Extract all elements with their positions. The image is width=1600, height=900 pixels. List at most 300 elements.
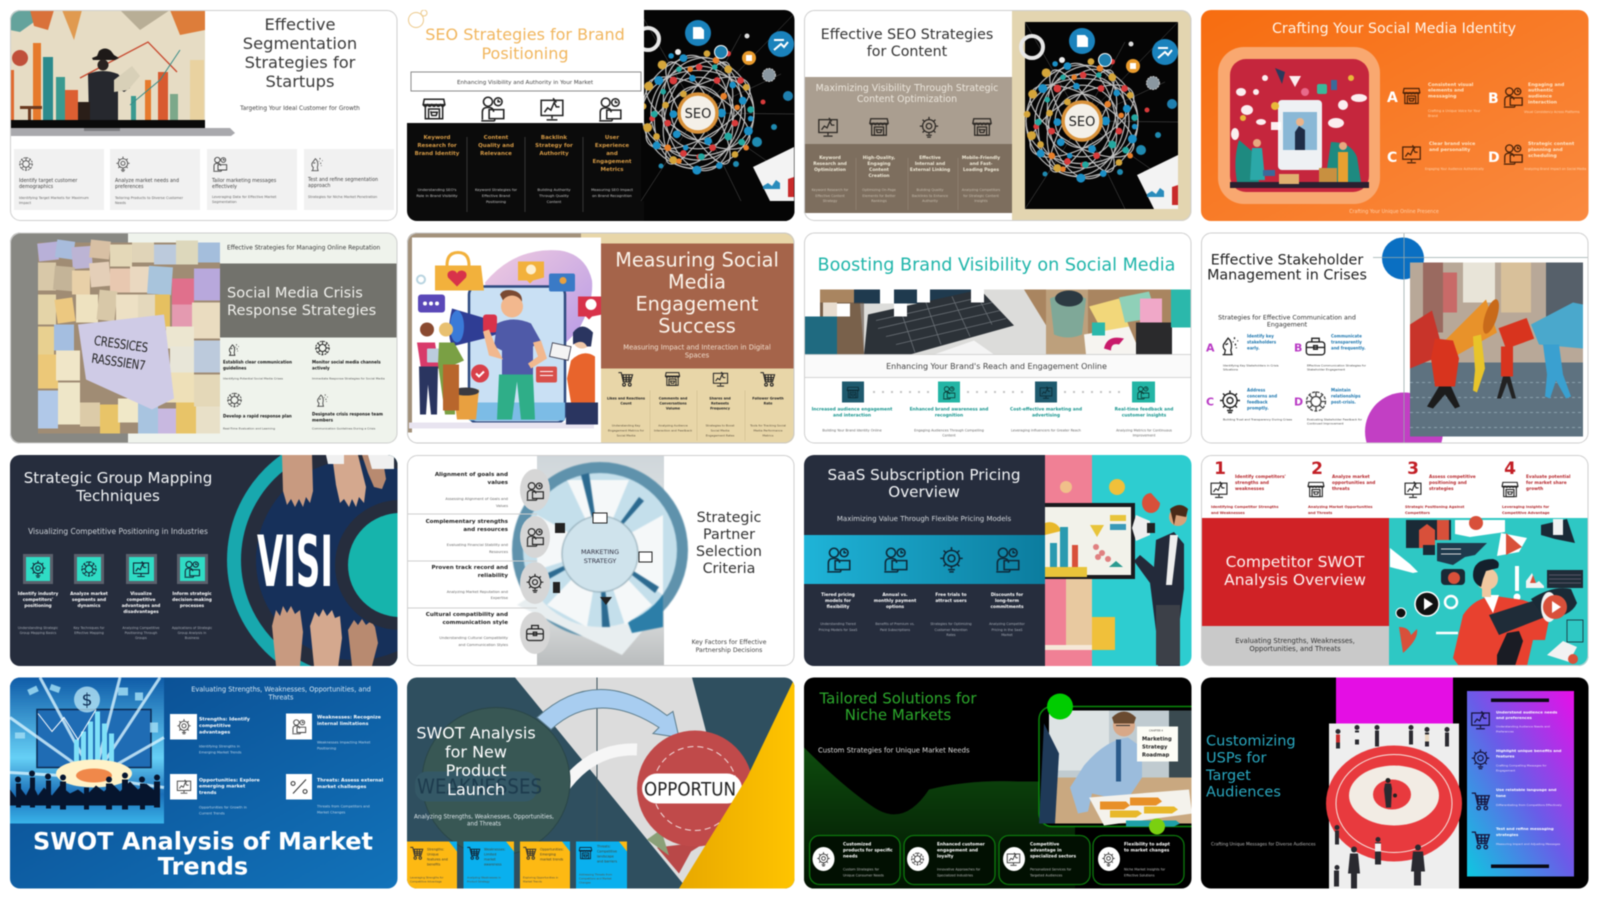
title: [696, 510, 762, 577]
column headings: Creation: [868, 173, 890, 179]
slide: SaaS Subscription Pricing Overview: [804, 455, 1192, 666]
slide: Measuring Social Media Engagement Success: [407, 232, 795, 444]
step headings: dynamics: [78, 603, 101, 609]
step captions: [18, 626, 212, 640]
threats: Threats: Assess external: [317, 778, 384, 784]
opportunities: [170, 774, 260, 816]
marketing strategy wheel: STRATEGY: [584, 557, 616, 565]
column captions: for Strategic Content: [963, 194, 999, 198]
column headings: Backlink: [541, 135, 567, 141]
opportunities: Current Trends: [199, 812, 225, 816]
column headings: monthly payment: [874, 598, 916, 604]
column captions: Measuring SEO Impact: [591, 188, 633, 192]
item C: [1206, 388, 1293, 422]
title: Boosting Brand Visibility on Social Media: [818, 256, 1175, 276]
gradient list panel: Understanding Audience Needs and: [1496, 724, 1550, 728]
column captions: Through Quality: [538, 194, 570, 198]
metric captions: [608, 424, 786, 438]
column captions: Building Authority: [537, 188, 571, 192]
step captions: Content: [942, 434, 956, 438]
four step cards: Identify target customer: [19, 178, 77, 184]
subtitle box: [411, 72, 641, 91]
step headings: threats: [1332, 486, 1350, 492]
SEO globe image: [1019, 22, 1178, 209]
column headings: Tiered pricing: [821, 592, 855, 598]
benefit cards: Unique Consumer Needs: [843, 874, 884, 878]
photo frame: Marketing: [1142, 736, 1172, 742]
item C: Address: [1247, 388, 1266, 392]
criterion rows: reliability: [478, 573, 508, 579]
item C: concerns and: [1247, 394, 1277, 398]
criterion rows: and resources: [463, 527, 509, 533]
title: [818, 690, 977, 724]
step headings: Inform strategic: [172, 591, 212, 597]
item A: A: [1206, 342, 1215, 354]
SWOT cards: Threats:: [596, 844, 611, 848]
title panel: Measuring Impact and Interaction in Digital: [623, 344, 771, 352]
criterion rows: communication style: [442, 620, 508, 626]
four step cards: preferences: [115, 184, 144, 190]
subtitle: Targeting Your Ideal Customer for Growth: [239, 106, 360, 112]
benefit cards: Customized: [843, 842, 871, 848]
item A: Identifying Key Stakeholders in Crisis: [1223, 364, 1279, 368]
column captions: Content: [547, 200, 562, 204]
column captions: Keyword Research for: [812, 188, 849, 192]
threats: Threats from Competitors and: [316, 804, 370, 808]
benefit cards: Enhanced customer: [937, 842, 986, 848]
item C: Building Trust and Transparency During Crises: [1223, 418, 1293, 422]
step headings: decision-making: [172, 597, 212, 603]
column headings: Effective: [919, 155, 941, 161]
weaknesses: Positioning: [317, 746, 336, 750]
column captions: Pricing Models for SaaS: [819, 628, 857, 632]
title: [243, 15, 357, 91]
item C: C: [1206, 396, 1214, 408]
metric headings: Volume: [666, 406, 681, 410]
blue circle: [1382, 238, 1424, 280]
metric headings: Follower Growth: [752, 396, 784, 400]
metric headings: Comments and: [659, 396, 688, 400]
step numbers: [1214, 459, 1516, 479]
item: team: Designate crisis response team: [312, 412, 383, 416]
item B: Engaging and: [1528, 82, 1564, 88]
criterion rows: Cultural compatibility and: [426, 612, 508, 618]
column captions: Building Quality: [917, 188, 943, 192]
gradient list panel: Differentiating from Competitors Effectively: [1496, 803, 1562, 807]
criterion rows: Proven track record and: [432, 565, 508, 571]
criterion rows: Values: [496, 504, 508, 508]
sticky-note wall: [37, 239, 220, 434]
title: Strategic Group Mapping: [24, 469, 212, 487]
title panel: Measuring Social: [615, 248, 779, 272]
benefit cards: specialized sectors: [1030, 854, 1077, 860]
column captions: Understanding SEO's: [418, 188, 456, 192]
step captions: [822, 428, 1172, 438]
item B: Communicate: [1331, 334, 1362, 338]
step headings: weaknesses: [1235, 486, 1265, 492]
hands photo with rings: VISI: [257, 521, 333, 603]
column headings: Brand Identity: [415, 151, 460, 157]
board and presenter illustration: [1045, 479, 1188, 666]
title: Target: [1205, 768, 1251, 784]
item: guidelines: Identifying Potential Social Media Crises: [223, 376, 283, 380]
step captions: Understanding Strategic: [18, 626, 58, 630]
icons: [423, 97, 621, 121]
strengths: Strengths: Identify: [199, 716, 251, 722]
step headings: positioning: [24, 603, 52, 609]
column captions: Elements for Better: [862, 194, 896, 198]
step numbers: 4: [1504, 459, 1516, 479]
benefit cards: Custom Strategies for: [843, 868, 880, 872]
four step cards: Strategies for Niche Market Penetration: [308, 195, 377, 199]
metric headings: Frequency: [710, 406, 731, 410]
item C: promptly.: [1247, 406, 1269, 410]
criterion rows: Resources: [489, 550, 508, 554]
column headings: Content: [869, 167, 889, 173]
item D: D: [1488, 150, 1500, 166]
criterion rows: Analyzing Market Reputation and: [447, 590, 508, 594]
metric captions: Social Media: [617, 434, 636, 438]
green wave: [804, 748, 1075, 888]
four step cards: Leveraging Data for Effective Market: [212, 195, 277, 199]
step headings: strategies: [1429, 486, 1454, 492]
SWOT cards: Addressing Threats from: [579, 872, 612, 876]
subtitle: [191, 686, 371, 702]
four step cards: Needs: [115, 201, 126, 205]
SWOT cards: Changes: [579, 880, 591, 884]
step headings: growth: [1526, 486, 1543, 492]
column headings: and: [606, 151, 618, 157]
step headings: advantages and: [122, 603, 160, 609]
title: Effective Stakeholder: [1211, 252, 1363, 268]
title panel: [601, 244, 795, 368]
metric captions: Media Performance: [754, 428, 783, 432]
SWOT cards: Limited: [484, 852, 496, 856]
item B: [1294, 334, 1367, 372]
step captions: Competitors: [1405, 511, 1430, 515]
item: monitor: Immediate Response Strategies for Social Media: [312, 376, 385, 380]
title: Effective: [264, 15, 336, 34]
subtitle: [692, 639, 767, 654]
column captions: Strategies for Optimizing: [930, 622, 972, 626]
title: Partner: [703, 527, 755, 543]
four step cards: Tailor marketing messages: [211, 178, 277, 184]
title: USPs for: [1206, 750, 1266, 766]
title: Crafting Your Social Media Identity: [1272, 21, 1516, 37]
gradient list panel: features: [1496, 754, 1515, 758]
title: [821, 27, 993, 60]
item B: and frequently.: [1331, 346, 1366, 350]
right beige panel: [601, 238, 795, 444]
SEO globe image: SEO: [685, 107, 711, 122]
step captions: Building Your Brand Identity Online: [822, 428, 882, 432]
item D: planning and: [1528, 147, 1563, 153]
item A: messaging: [1428, 94, 1456, 100]
item B: B: [1294, 342, 1302, 354]
slide: Crafting Your Social Media Identity: [1201, 10, 1589, 221]
item A: stakeholders: [1247, 340, 1277, 344]
title: [827, 466, 1021, 501]
step headings: opportunities and: [1332, 480, 1375, 486]
step headings: strengths and: [1235, 480, 1269, 486]
title: SWOT Analysis of Market: [33, 828, 373, 856]
subtitle: Threats: [268, 694, 294, 702]
column headings: Authority: [539, 151, 569, 157]
item B: Stakeholder Engagement: [1307, 368, 1346, 372]
step captions: and Weaknesses: [1211, 511, 1245, 515]
item D: D: [1294, 396, 1303, 408]
sticky-note wall: CRESSICES: [93, 333, 149, 356]
step captions: Analyzing Competitive: [122, 626, 160, 630]
column headings: Discounts for: [991, 592, 1024, 598]
slide: Competitor SWOT Analysis Overview: [1201, 455, 1589, 666]
step headings: [812, 406, 1173, 418]
benefit cards: Innovative Approaches for: [937, 868, 981, 872]
sticky-note wall: RASSSIEN7: [91, 350, 146, 373]
title panel: Media: [668, 270, 726, 294]
item A: A: [1387, 90, 1398, 106]
column headings: Metrics: [601, 167, 624, 173]
SWOT cards: landscape: [597, 854, 614, 858]
slide: Tailored Solutions for Niche Markets: [804, 678, 1204, 888]
step headings: Visualize: [130, 591, 152, 597]
step headings: processes: [180, 603, 205, 609]
item D: relationships: [1331, 394, 1361, 398]
item: plan: [223, 393, 292, 430]
step captions: and Threats: [1308, 511, 1332, 515]
gradient list panel: Use relatable language and: [1496, 787, 1557, 792]
subtitle: [414, 814, 554, 828]
subtitle box: Enhancing Visibility and Authority in Your Market: [457, 80, 594, 86]
title: Overview: [888, 483, 960, 501]
strengths: competitive: [199, 723, 231, 729]
step headings: customer insights: [1122, 412, 1167, 418]
column headings: Research for: [417, 143, 457, 149]
column headings: commitments: [990, 604, 1024, 610]
photo frame: [1039, 706, 1204, 826]
slide: Effective Segmentation Strategies for Startups: [10, 10, 398, 221]
column captions: Optimizing On-Page: [862, 188, 896, 192]
item B: Effective Communication Strategies for: [1307, 364, 1367, 368]
step captions: Effective Mapping: [74, 631, 104, 635]
column headings: Content: [484, 135, 509, 141]
criterion rows: Alignment of goals and: [435, 472, 508, 478]
step headings: Identify industry: [18, 591, 58, 597]
column headings: and Fast-: [970, 161, 993, 167]
title: [416, 724, 536, 799]
four step cards: Impact: [19, 201, 32, 205]
SWOT cards: Leveraging Strengths for: [410, 876, 444, 880]
step headings: for market share: [1526, 480, 1567, 486]
step numbers: 3: [1407, 459, 1419, 479]
item C: C: [1387, 150, 1397, 166]
metric captions: Engagement Rates: [706, 434, 735, 438]
step headings: segments and: [72, 597, 106, 603]
four step cards: [14, 149, 394, 210]
purple circle: [1365, 392, 1443, 470]
item: guidelines: [223, 344, 292, 380]
tagline: Effective Strategies for Managing Online Reputation: [227, 246, 381, 252]
metric icons: [618, 372, 775, 386]
step headings: Real-time feedback and: [1115, 406, 1173, 412]
benefit cards: Niche Market Insights for: [1124, 868, 1166, 872]
SWOT cards: and barriers: [597, 860, 617, 864]
weaknesses: Weaknesses Impacting Market: [317, 740, 371, 744]
benefit cards: engagement and: [937, 848, 978, 854]
column headings: Engagement: [592, 159, 632, 165]
image frame: [1218, 47, 1380, 204]
column headings: Strategy for: [535, 143, 573, 149]
item: guidelines: guidelines: [223, 366, 247, 370]
title: [33, 828, 373, 880]
item C: feedback: [1247, 400, 1268, 404]
column captions: Insights: [974, 199, 988, 203]
item C: and personality: [1429, 147, 1470, 153]
laptop illustration: [10, 10, 235, 136]
subtitle band: Enhancing Your Brand's Reach and Engagement Online: [886, 362, 1107, 371]
weaknesses: [286, 714, 381, 750]
four step cards: approach: [308, 183, 330, 189]
cyan icon band: [804, 535, 1045, 584]
item: monitor: actively: [312, 366, 330, 370]
title panel: Engagement: [636, 292, 759, 316]
metric captions: Tools for Tracking Social: [749, 424, 786, 428]
metric headings: Rate: [764, 402, 773, 406]
icons: [819, 117, 991, 137]
slide: Effective SEO Strategies for Content: [804, 10, 1192, 221]
step headings: recognition: [935, 412, 963, 418]
SWOT cards: Product Strategy: [467, 880, 490, 884]
subtitle: Crafting Unique Messages for Diverse Audiences: [1211, 842, 1316, 848]
step captions: Leveraging Influencers for Greater Reach: [1011, 428, 1081, 432]
subtitle: and Threats: [467, 822, 501, 828]
step headings: Cost-effective marketing and: [1010, 406, 1082, 412]
step captions: Group Mapping Basics: [20, 631, 57, 635]
step captions: Identifying Competitor Strengths: [1211, 505, 1278, 509]
step captions: Leveraging Insights for: [1502, 505, 1549, 509]
diagonal arrow graphic: [415, 678, 795, 888]
column headings: Free trials to: [935, 592, 967, 598]
subtitle: Content Optimization: [857, 94, 957, 105]
item D: post-crisis.: [1331, 400, 1356, 404]
step captions: Analyzing Metrics for Continuous: [1116, 428, 1172, 432]
decorative rings: [408, 10, 427, 28]
benefit cards: Effective Solutions: [1124, 874, 1155, 878]
diagonal arrow graphic: WEAKNESSES: [417, 774, 542, 798]
footer: Crafting Your Unique Online Presence: [1349, 209, 1439, 215]
opportunities: Opportunities: Explore: [199, 778, 260, 784]
item A: early.: [1247, 346, 1260, 350]
item B: interaction: [1528, 100, 1557, 106]
photo frame: CHAPTER 4: [1149, 728, 1163, 732]
title: Strategies for: [245, 53, 356, 72]
item: guidelines: Establish clear communication: [223, 360, 292, 364]
weaknesses: internal limitations: [317, 721, 369, 727]
title: for Content: [867, 44, 948, 60]
item A: Consistent visual: [1428, 82, 1474, 88]
subtitle: Analyzing Strengths, Weaknesses, Opportunities,: [414, 814, 554, 820]
item A: Identify key: [1247, 334, 1274, 338]
slide: SWOT Analysis for New Product Launch: [407, 678, 795, 888]
slide: Strategic Group Mapping Techniques: [10, 431, 485, 689]
item: team: Communication Guidelines During a Crisis: [312, 426, 376, 430]
SWOT cards: market trends: [540, 858, 564, 862]
gradient list panel: Crafting Compelling Messages for: [1496, 764, 1547, 768]
item D: [1488, 141, 1586, 171]
item: plan: Real-Time Evaluation and Learning: [223, 426, 275, 430]
title: for New: [445, 742, 507, 762]
illustration: social media promoter: [409, 250, 602, 428]
title: Strategic: [697, 510, 761, 526]
slide: SWOT Analysis of Market Trends: [10, 678, 398, 888]
column captions: Rates: [946, 633, 956, 637]
step captions: Positioning Through: [125, 631, 157, 635]
four step cards: Identifying Target Markets for Maximum: [19, 196, 89, 200]
slide: Customizing USPs for Target Audiences: [1201, 678, 1589, 888]
SWOT cards: Competitive: [597, 850, 617, 854]
benefit cards: Personalized Services for: [1030, 868, 1072, 872]
criterion rows: [407, 472, 537, 647]
step headings: and interaction: [833, 412, 871, 418]
brown band: [804, 144, 1012, 213]
column captions: [416, 188, 633, 204]
item B: B: [1488, 91, 1499, 107]
slide: Strategic Partner Selection Criteria: [407, 455, 795, 666]
SWOT cards: Competitors and Market: [579, 876, 612, 880]
column captions: Market: [1001, 633, 1013, 637]
weaknesses: Weaknesses: Recognize: [317, 714, 381, 720]
four step cards: Test and refine segmentation: [307, 177, 378, 183]
title band: [220, 264, 398, 338]
criterion rows: Complementary strengths: [426, 519, 509, 525]
gradient list panel: tone: [1496, 793, 1506, 798]
desk photo: [804, 290, 1192, 354]
step headings: Evaluate potential: [1526, 474, 1571, 480]
metric captions: Engagement Metrics for: [608, 428, 645, 432]
item B: [1488, 82, 1580, 114]
step icons: [842, 382, 1155, 402]
step headings: disadvantages: [123, 609, 159, 615]
benefit cards: to market changes: [1124, 848, 1170, 854]
item: plan: Develop a rapid response plan: [223, 414, 292, 418]
column captions: Strategy: [823, 199, 837, 203]
four step cards: effectively: [212, 184, 237, 190]
step headings: competitors': [23, 597, 53, 603]
title: SWOT Analysis: [416, 724, 536, 742]
column headings: [813, 155, 1000, 179]
SWOT cards: benefits: [427, 862, 441, 866]
column headings: Relevance: [480, 151, 512, 157]
column captions: Rankings: [871, 199, 887, 203]
megaphone photo: [1410, 262, 1583, 436]
red title panel: [1201, 518, 1389, 626]
market chart crowd image: $: [82, 690, 92, 710]
photo frame: Strategy: [1142, 744, 1168, 750]
metric captions: Interaction and Feedback: [654, 428, 692, 432]
subtitle: Maximizing Visibility Through Strategic: [816, 83, 998, 94]
column captions: on Brand Recognition: [592, 194, 632, 198]
title: Niche Markets: [845, 706, 951, 724]
column headings: [415, 135, 632, 173]
marketing strategy wheel: [512, 455, 688, 666]
benefit cards: Competitive: [1030, 842, 1059, 848]
benefit cards: products for specific: [843, 848, 893, 854]
teal illustration: [1389, 516, 1589, 666]
title: Effective SEO Strategies: [821, 27, 993, 43]
step icons: [1211, 482, 1518, 497]
photo frame: Roadmap: [1142, 752, 1170, 758]
subtitle: Visualizing Competitive Positioning in Industries: [28, 527, 208, 536]
